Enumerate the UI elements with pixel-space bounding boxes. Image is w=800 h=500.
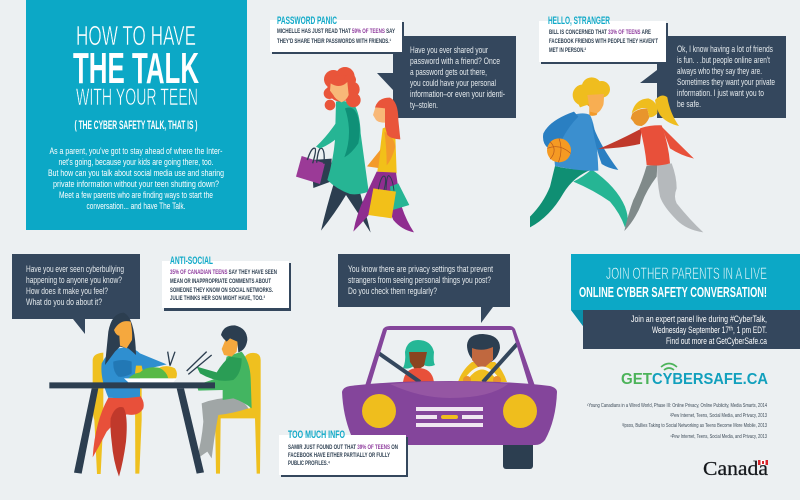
intro paragraph: private information without your teen shutting down? bbox=[53, 179, 219, 189]
grille bbox=[416, 407, 483, 427]
speech bubble: password: ty–stolen. bbox=[410, 100, 438, 111]
callout: hello stranger: BILL IS CONCERNED THAT 33% OF TEENS ARE bbox=[549, 29, 651, 36]
callout: too much info bbox=[279, 429, 408, 477]
car roof frame bbox=[365, 326, 535, 386]
callout: too much info: FACEBOOK HAVE EITHER PARTIALLY OR FULLY bbox=[288, 452, 390, 459]
callout: anti-social: SOMEONE THEY KNOW ON SOCIAL NETWORKS. bbox=[170, 287, 273, 294]
speech bubble: password: information–or even your identi- bbox=[410, 89, 505, 100]
footnotes: ³Ipsos, Bullies Taking to Social Networking as Teens Become More Mobile, 2013 bbox=[622, 423, 767, 429]
speech bubble: stranger: be safe. bbox=[677, 99, 701, 110]
illustration: father and daughter bbox=[530, 77, 703, 232]
speech bubble: password: password with a friend? Once bbox=[410, 56, 500, 67]
callout: password panic: PASSWORD PANIC bbox=[277, 15, 337, 27]
panel: join conversation bbox=[571, 254, 800, 349]
heading: how to have the talk: HOW TO HAVE bbox=[76, 20, 196, 51]
logo: Canada wordmark: Canada bbox=[703, 458, 768, 480]
callout: anti-social: JULIE THINKS HER SON MIGHT HAVE, TOO.³ bbox=[170, 295, 266, 302]
speech bubble: privacy settings: You know there are privacy settings that prevent bbox=[348, 264, 493, 275]
callout: too much info: PUBLIC PROFILES.⁴ bbox=[288, 460, 330, 467]
intro paragraph: net's going, because your kids are going there, too. bbox=[58, 157, 214, 167]
callout: password panic: THEY'D SHARE THEIR PASSWORDS WITH FRIENDS.¹ bbox=[277, 38, 391, 45]
heading: how to have the talk: WITH YOUR TEEN bbox=[76, 84, 198, 111]
speech bubble: cyberbullying: happening to anyone you know? bbox=[26, 275, 122, 286]
speech bubble: privacy settings: strangers from seeing personal things you post? bbox=[348, 275, 491, 286]
intro paragraph bbox=[48, 146, 224, 211]
callout: too much info: TOO MUCH INFO bbox=[288, 429, 345, 441]
subheading: ( THE CYBER SAFETY TALK, THAT IS ) bbox=[74, 118, 198, 132]
heading: how to have the talk bbox=[73, 20, 199, 111]
intro paragraph: Meet a few parents who are finding ways to start the bbox=[59, 190, 213, 200]
callout: anti-social bbox=[162, 255, 291, 311]
footnotes: ²Pew Internet, Teens, Social Media, and Privacy, 2013 bbox=[670, 413, 767, 419]
illustration: mother and daughter shopping bbox=[296, 67, 414, 233]
callout: hello stranger: FACEBOOK FRIENDS WITH PEOPLE THEY HAVEN'T bbox=[549, 38, 658, 45]
speech bubble: password: Have you ever shared your bbox=[410, 45, 488, 56]
speech bubble: cyberbullying: What do you do about it? bbox=[26, 297, 102, 308]
heading: how to have the talk: THE TALK bbox=[73, 44, 199, 93]
callout: too much info: SAMIR JUST FOUND OUT THAT 39% OF TEENS ON bbox=[288, 444, 398, 451]
logo: GetCyberSafe.ca: GET bbox=[621, 371, 653, 388]
callout: password panic: MICHELLE HAS JUST READ THAT 59% OF TEENS SAY bbox=[277, 28, 395, 35]
callout: anti-social: MEAN OR INAPPROPRIATE COMMENTS ABOUT bbox=[170, 278, 271, 285]
footnotes bbox=[587, 403, 767, 440]
speech bubble: cyberbullying bbox=[12, 254, 140, 334]
callout: password panic bbox=[270, 15, 404, 54]
illustration: car with parent and teen bbox=[342, 326, 557, 469]
intro paragraph: conversation... and have The Talk. bbox=[86, 201, 186, 211]
illustration: mother and son at table bbox=[49, 313, 261, 477]
intro paragraph: As a parent, you've got to stay ahead of where the Inter- bbox=[50, 146, 222, 156]
panel: intro title bbox=[26, 0, 247, 230]
callout: hello stranger: MET IN PERSON.² bbox=[549, 47, 587, 54]
speech bubble: stranger bbox=[640, 36, 786, 118]
car tire bbox=[503, 440, 533, 469]
windshield shade bbox=[390, 382, 508, 398]
headlights bbox=[362, 394, 537, 428]
event details bbox=[583, 310, 800, 349]
logo: GetCyberSafe.ca bbox=[621, 364, 768, 388]
speech bubble: privacy settings: Do you check them regularly? bbox=[348, 286, 437, 297]
callout: anti-social: ANTI-SOCIAL bbox=[170, 255, 213, 267]
callout: hello stranger bbox=[539, 15, 668, 64]
speech bubble: cyberbullying: How does it make you feel? bbox=[26, 286, 108, 297]
speech bubble: password: a password gets out there, bbox=[410, 67, 487, 78]
footnotes: ⁴Pew Internet, Teens, Social Media, and Privacy, 2013 bbox=[670, 434, 767, 440]
seat belts bbox=[377, 343, 518, 382]
intro paragraph: But how can you talk about social media use and sharing bbox=[48, 168, 224, 178]
callout: anti-social: 35% OF CANADIAN TEENS SAY THEY HAVE SEEN bbox=[170, 269, 277, 276]
logo: GetCyberSafe.ca: CYBERSAFE.CA bbox=[652, 371, 768, 388]
car body bbox=[342, 381, 557, 445]
speech bubble: privacy settings bbox=[338, 254, 510, 323]
speech bubble: stranger: always who they say they are. bbox=[677, 66, 762, 77]
speech bubble: stranger: information. I just want you to bbox=[677, 88, 764, 99]
speech bubble: password: you could have your personal bbox=[410, 78, 496, 89]
callout: hello stranger: HELLO, STRANGER bbox=[548, 15, 610, 27]
speech bubble: password bbox=[377, 36, 516, 118]
driver bbox=[458, 334, 507, 384]
speech bubble: cyberbullying: Have you ever seen cyberbullying bbox=[26, 264, 124, 275]
teen passenger bbox=[403, 340, 435, 382]
